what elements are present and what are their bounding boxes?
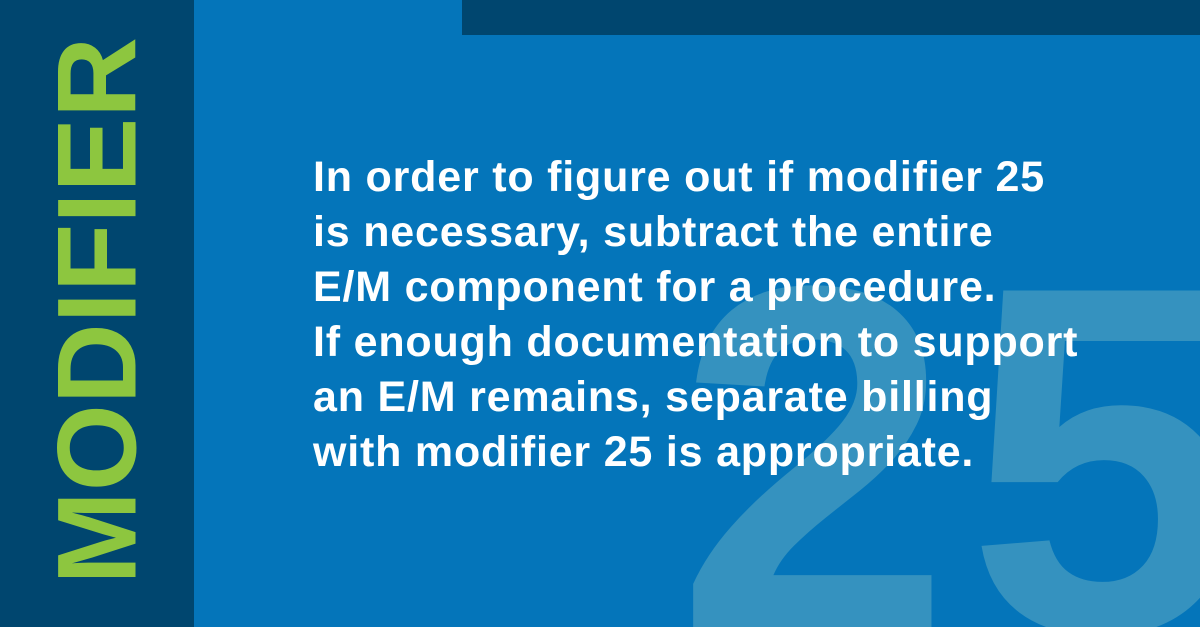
body text: an E/M remains, separate billing: [313, 373, 993, 421]
body text: [312, 153, 1078, 476]
body text: with modifier 25 is appropriate.: [313, 428, 974, 476]
left dark sidebar: [0, 0, 194, 627]
body text: E/M component for a procedure.: [313, 263, 996, 311]
body text: If enough documentation to support: [313, 318, 1078, 366]
body text: In order to figure out if modifier 25: [313, 153, 1045, 201]
vertical title MODIFIER: MODIFIER: [34, 37, 160, 584]
body text: is necessary, subtract the entire: [313, 208, 993, 256]
top dark bar: [462, 0, 1200, 35]
